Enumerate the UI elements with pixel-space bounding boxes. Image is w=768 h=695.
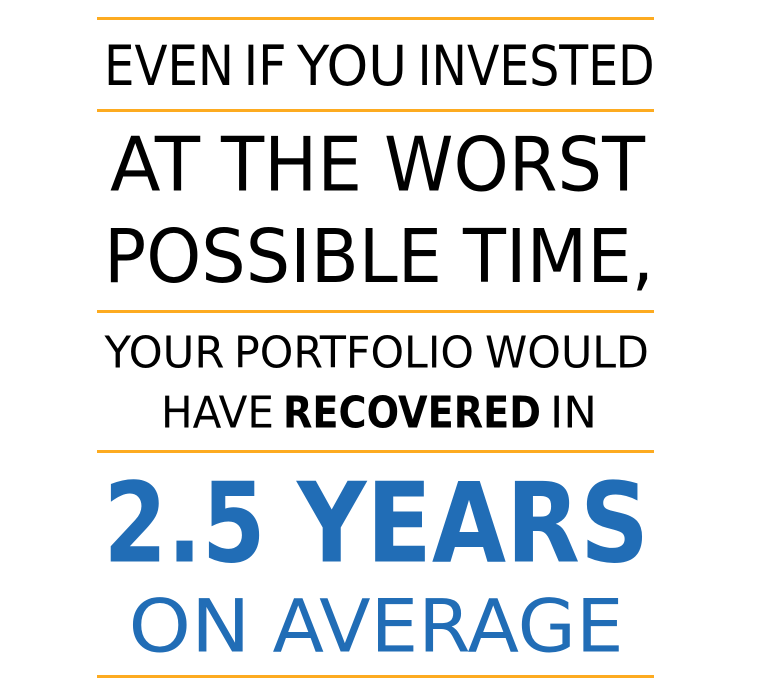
heading line: even if you invested: YOU — [296, 34, 407, 98]
text line: your portfolio would: WOULD — [485, 328, 649, 378]
heading line: possible time: POSSIBLE — [104, 214, 442, 300]
highlight: on average: AVERAGE — [272, 584, 624, 670]
text line: have recovered in — [161, 388, 597, 438]
heading line: even if you invested: EVEN — [104, 34, 234, 98]
heading line: even if you invested: INVESTED — [418, 34, 655, 98]
highlight: 2.5 years: YEARS — [295, 460, 649, 588]
highlight: on average — [128, 584, 624, 670]
text line: have recovered in: IN — [550, 388, 597, 438]
heading line: at the worst — [110, 120, 646, 208]
heading line: at the worst: WORST — [384, 120, 646, 208]
heading line: at the worst: AT — [110, 120, 201, 208]
heading line: possible time: TIME, — [462, 214, 654, 300]
text line: have recovered in: HAVE — [161, 388, 274, 438]
text line: your portfolio would: PORTFOLIO — [234, 328, 474, 378]
heading line: even if you invested — [104, 34, 655, 98]
text line: your portfolio would: YOUR — [104, 328, 224, 378]
text line: have recovered in: RECOVERED — [283, 388, 541, 438]
heading line: even if you invested: IF — [244, 34, 287, 98]
highlight: 2.5 years: 2.5 — [104, 460, 266, 588]
highlight: on average: ON — [128, 584, 250, 670]
text line: your portfolio would — [104, 328, 649, 378]
highlight: 2.5 years — [104, 460, 649, 588]
heading line: possible time — [104, 214, 654, 300]
heading line: at the worst: THE — [220, 120, 362, 208]
